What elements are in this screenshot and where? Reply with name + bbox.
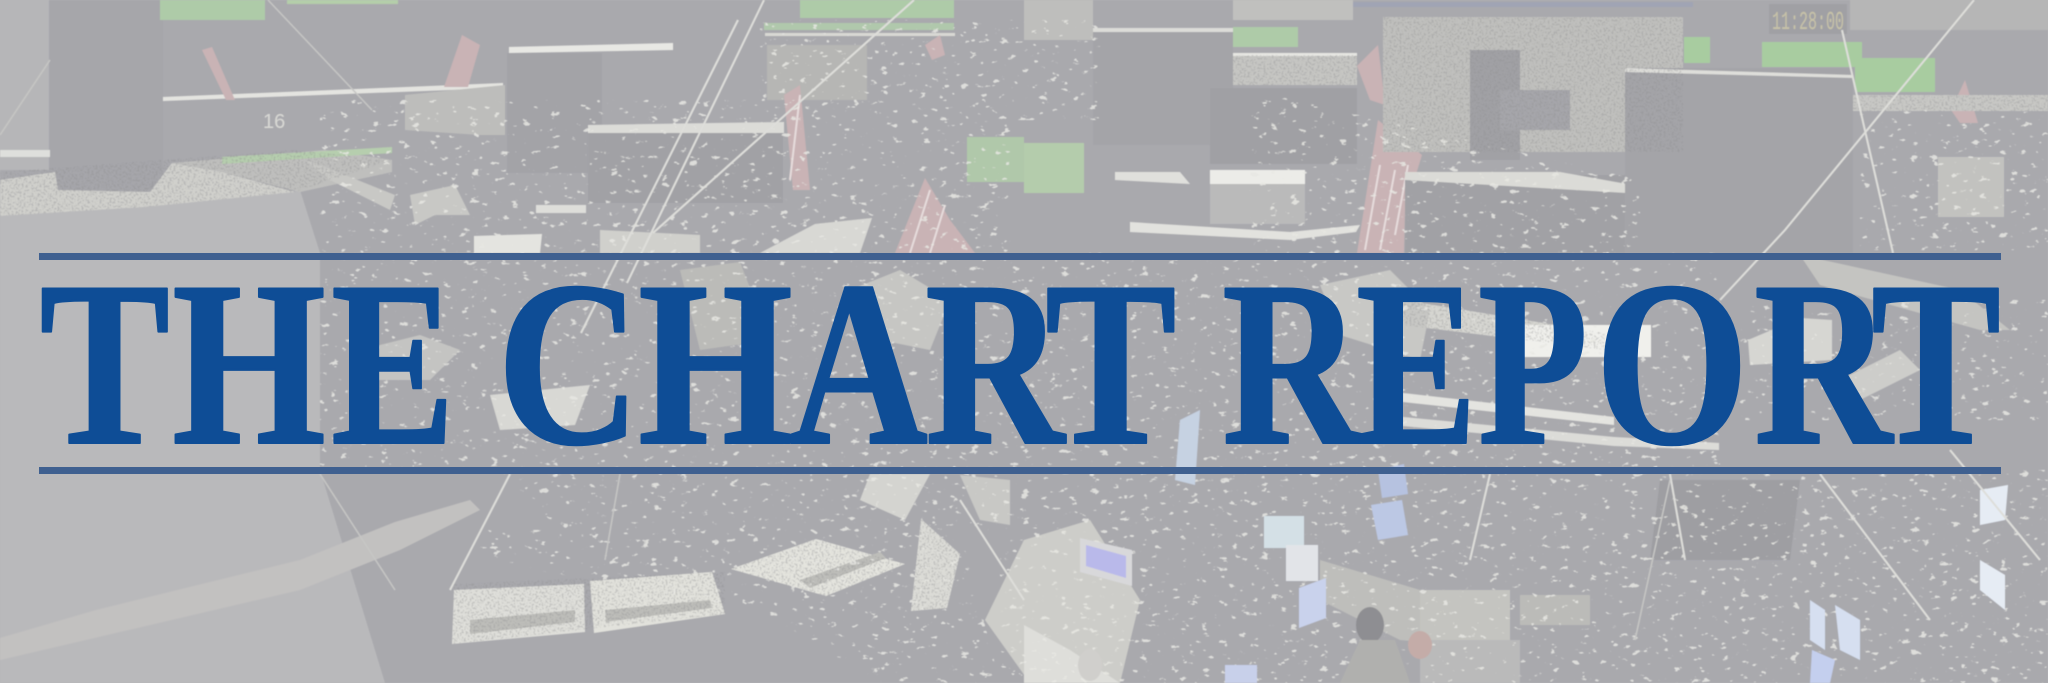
booth number 16: 16 (263, 111, 285, 133)
lower-left empty floor (0, 190, 385, 683)
lower centre sheets of paper (452, 584, 585, 644)
title: T (40, 234, 170, 495)
upper-left wall and pillar (0, 0, 49, 170)
trading booths, right (1093, 30, 1233, 145)
lower right machinery (985, 520, 1140, 683)
title: E (331, 234, 455, 495)
people (1356, 607, 1384, 643)
ledges and top of booths (163, 83, 503, 101)
green tickers, top (160, 0, 265, 20)
title: P (1478, 234, 1588, 495)
right upper textured wall (1383, 17, 1683, 152)
title: R (925, 234, 1066, 495)
center mid details (360, 335, 460, 380)
title: H (172, 234, 326, 495)
white booth patches mid (474, 234, 542, 253)
title: C (497, 234, 641, 495)
monitors (1080, 538, 1132, 586)
bottom rule (39, 467, 2001, 474)
title: R (1754, 234, 1894, 495)
title: O (1595, 234, 1749, 495)
title: T (1045, 234, 1174, 495)
dark, quieter areas (1650, 480, 1800, 560)
title: A (789, 234, 928, 495)
title: H (638, 234, 793, 495)
clock display (1769, 4, 1847, 34)
American flags (202, 17, 1978, 253)
title: R (1222, 234, 1365, 495)
background photo: trading floor: 11:28:00 (1772, 7, 1844, 37)
top rule (39, 253, 2001, 260)
mid band, right of the title (1403, 300, 1605, 350)
thin white cables (450, 0, 2040, 620)
left floor patches (0, 163, 295, 216)
title: E (1356, 234, 1477, 495)
title: T (1871, 234, 2001, 495)
